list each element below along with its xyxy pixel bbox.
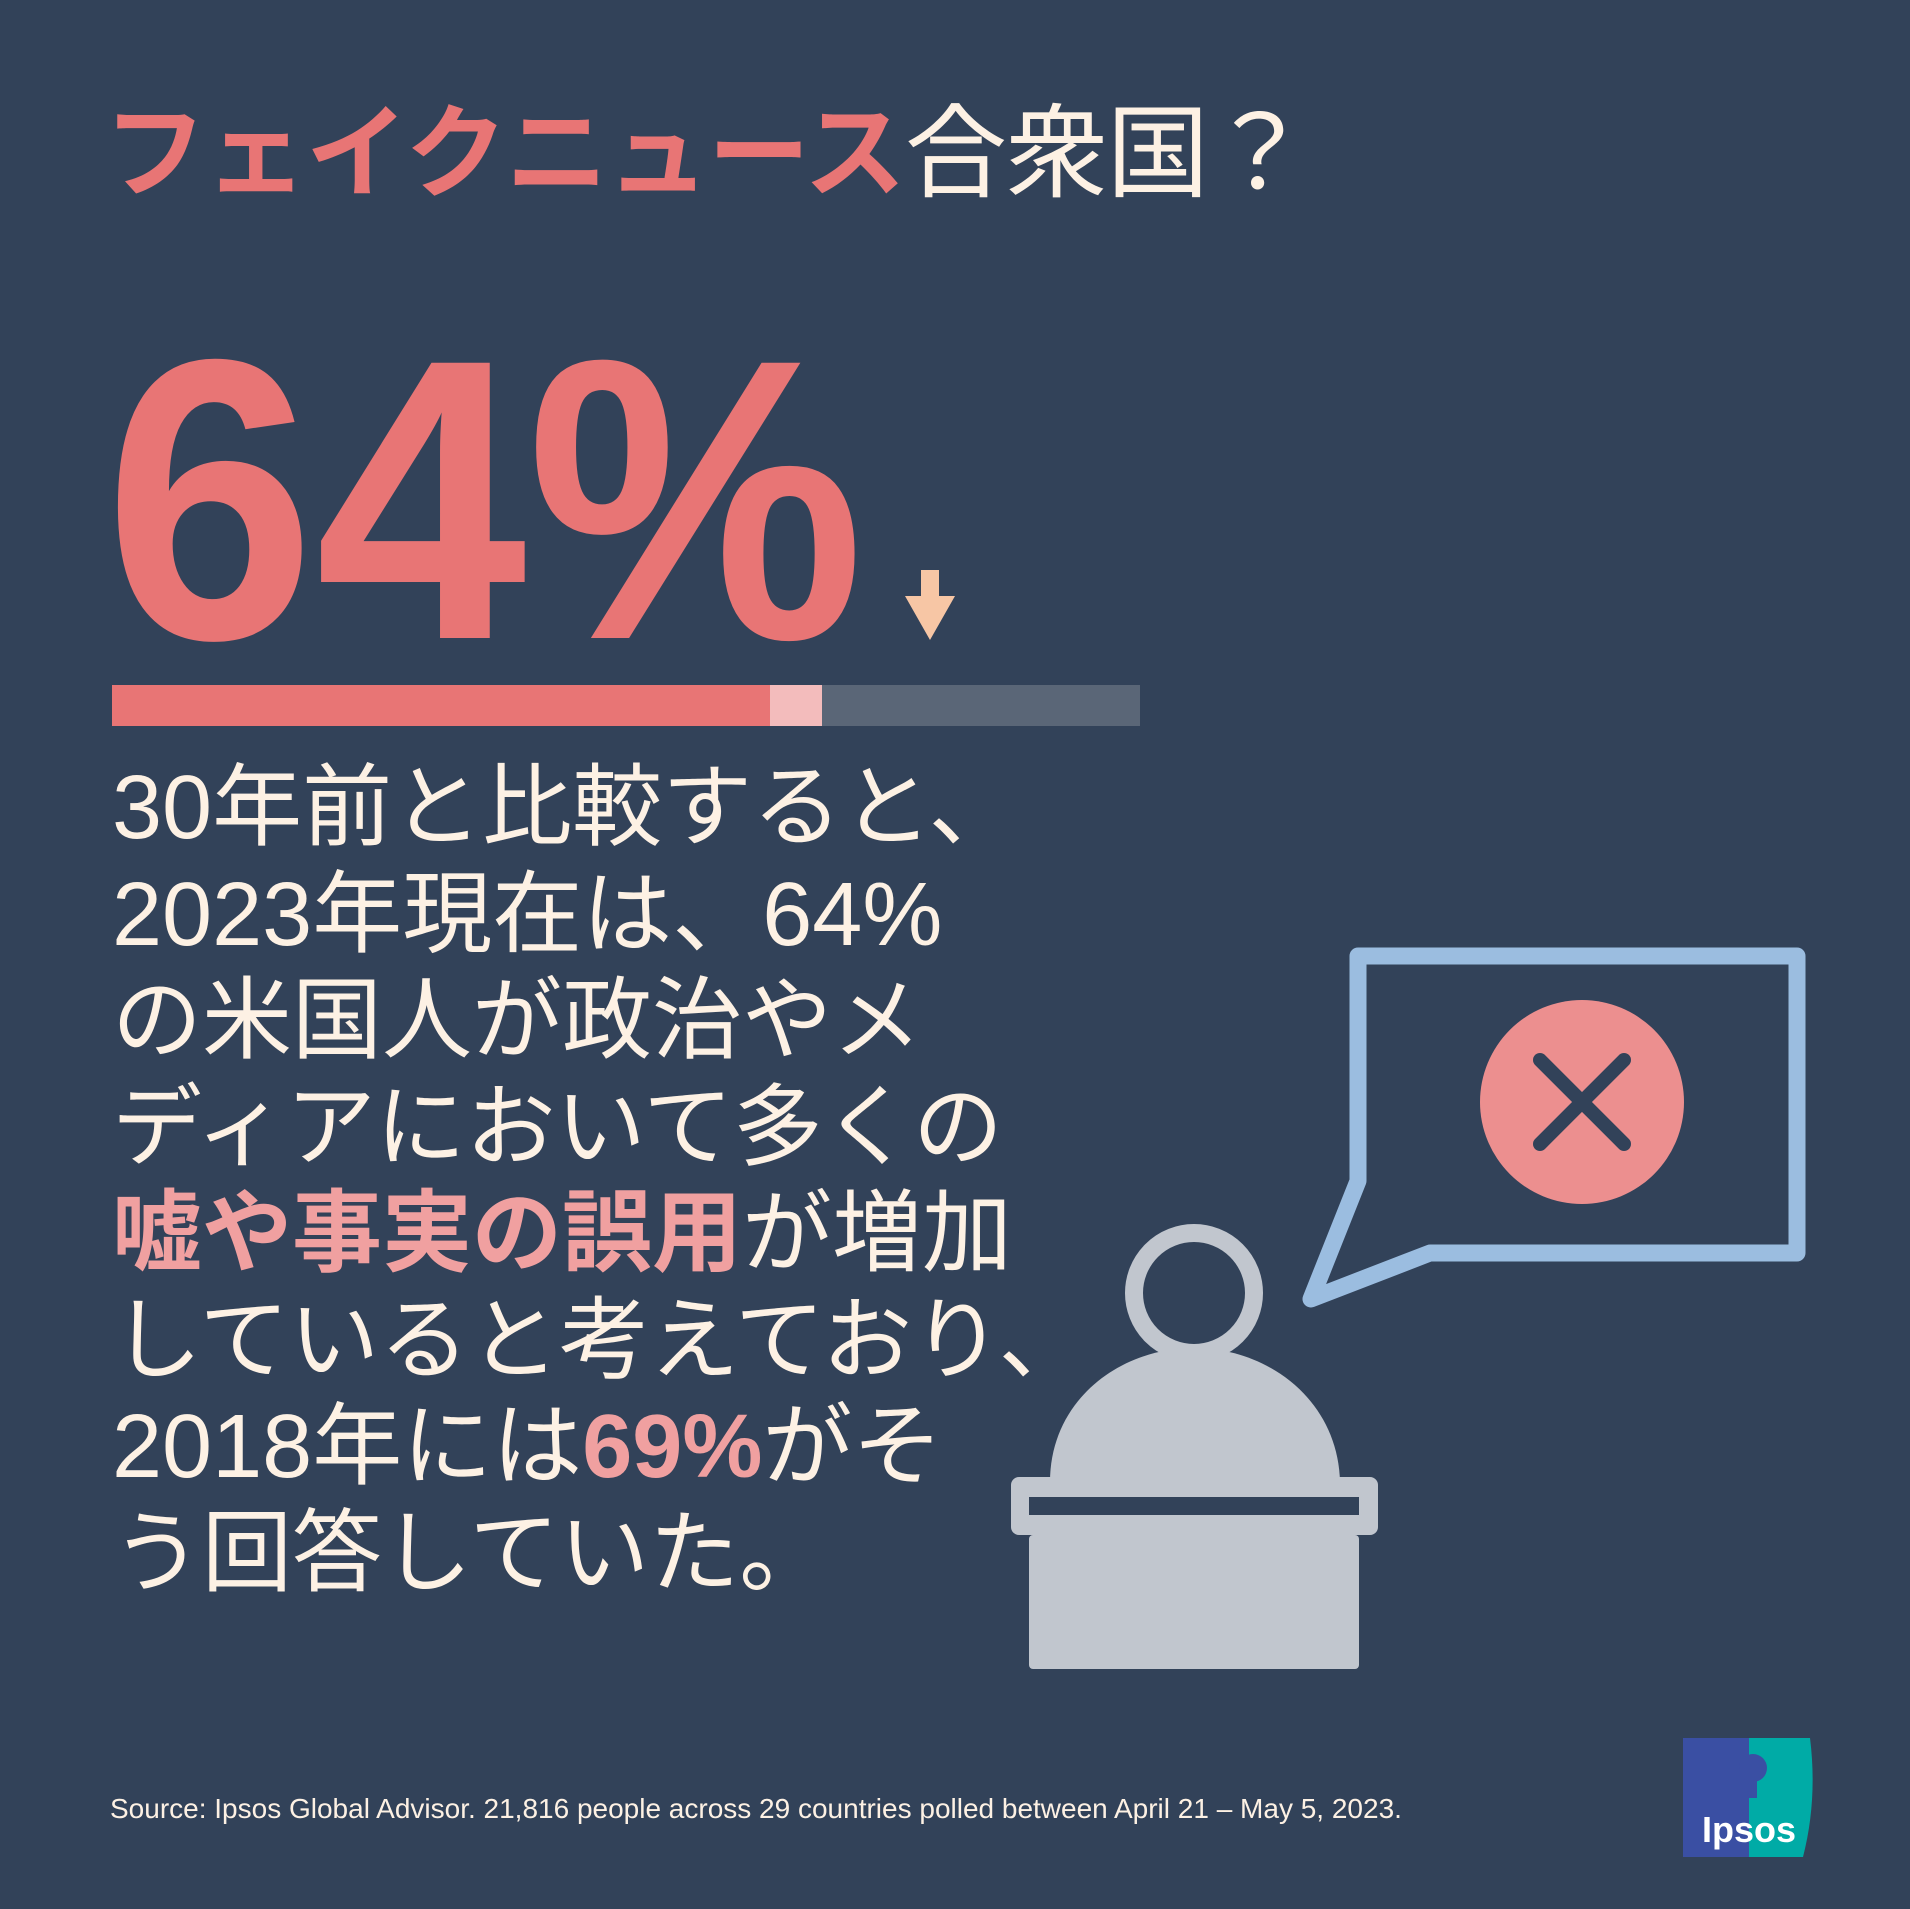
logo: Ipsos (1683, 1738, 1813, 1857)
speech bubble (1311, 956, 1797, 1299)
body text: していると考えており、 (112, 1290, 1088, 1390)
body text: の米国人が政治やメ (112, 971, 922, 1071)
body text: 2023年現在は、64% (112, 864, 942, 964)
body text: ディアにおいて多くの (112, 1078, 1003, 1178)
icon: red cross circle (1480, 1000, 1684, 1204)
logo: Ipsos: Ipsos (1702, 1809, 1796, 1850)
person at podium (1011, 1233, 1378, 1669)
source footnote: Source: Ipsos Global Advisor. 21,816 people across 29 countries polled between April 21 – May 5, 2023. (110, 1793, 1402, 1824)
body text (112, 758, 1088, 1604)
title: フェイクニュース合衆国？ (104, 97, 1309, 211)
body text: 嘘や事実の誤用が増加 (112, 1184, 1012, 1284)
bar chart: 64% vs 69% (112, 685, 1140, 726)
icon: down arrow (905, 570, 955, 640)
big number 64%: 64% (104, 276, 865, 723)
body text: う回答していた。 (112, 1504, 829, 1604)
body text: 2018年には69%がそ (112, 1397, 942, 1497)
body text: 30年前と比較すると、 (112, 758, 1019, 858)
